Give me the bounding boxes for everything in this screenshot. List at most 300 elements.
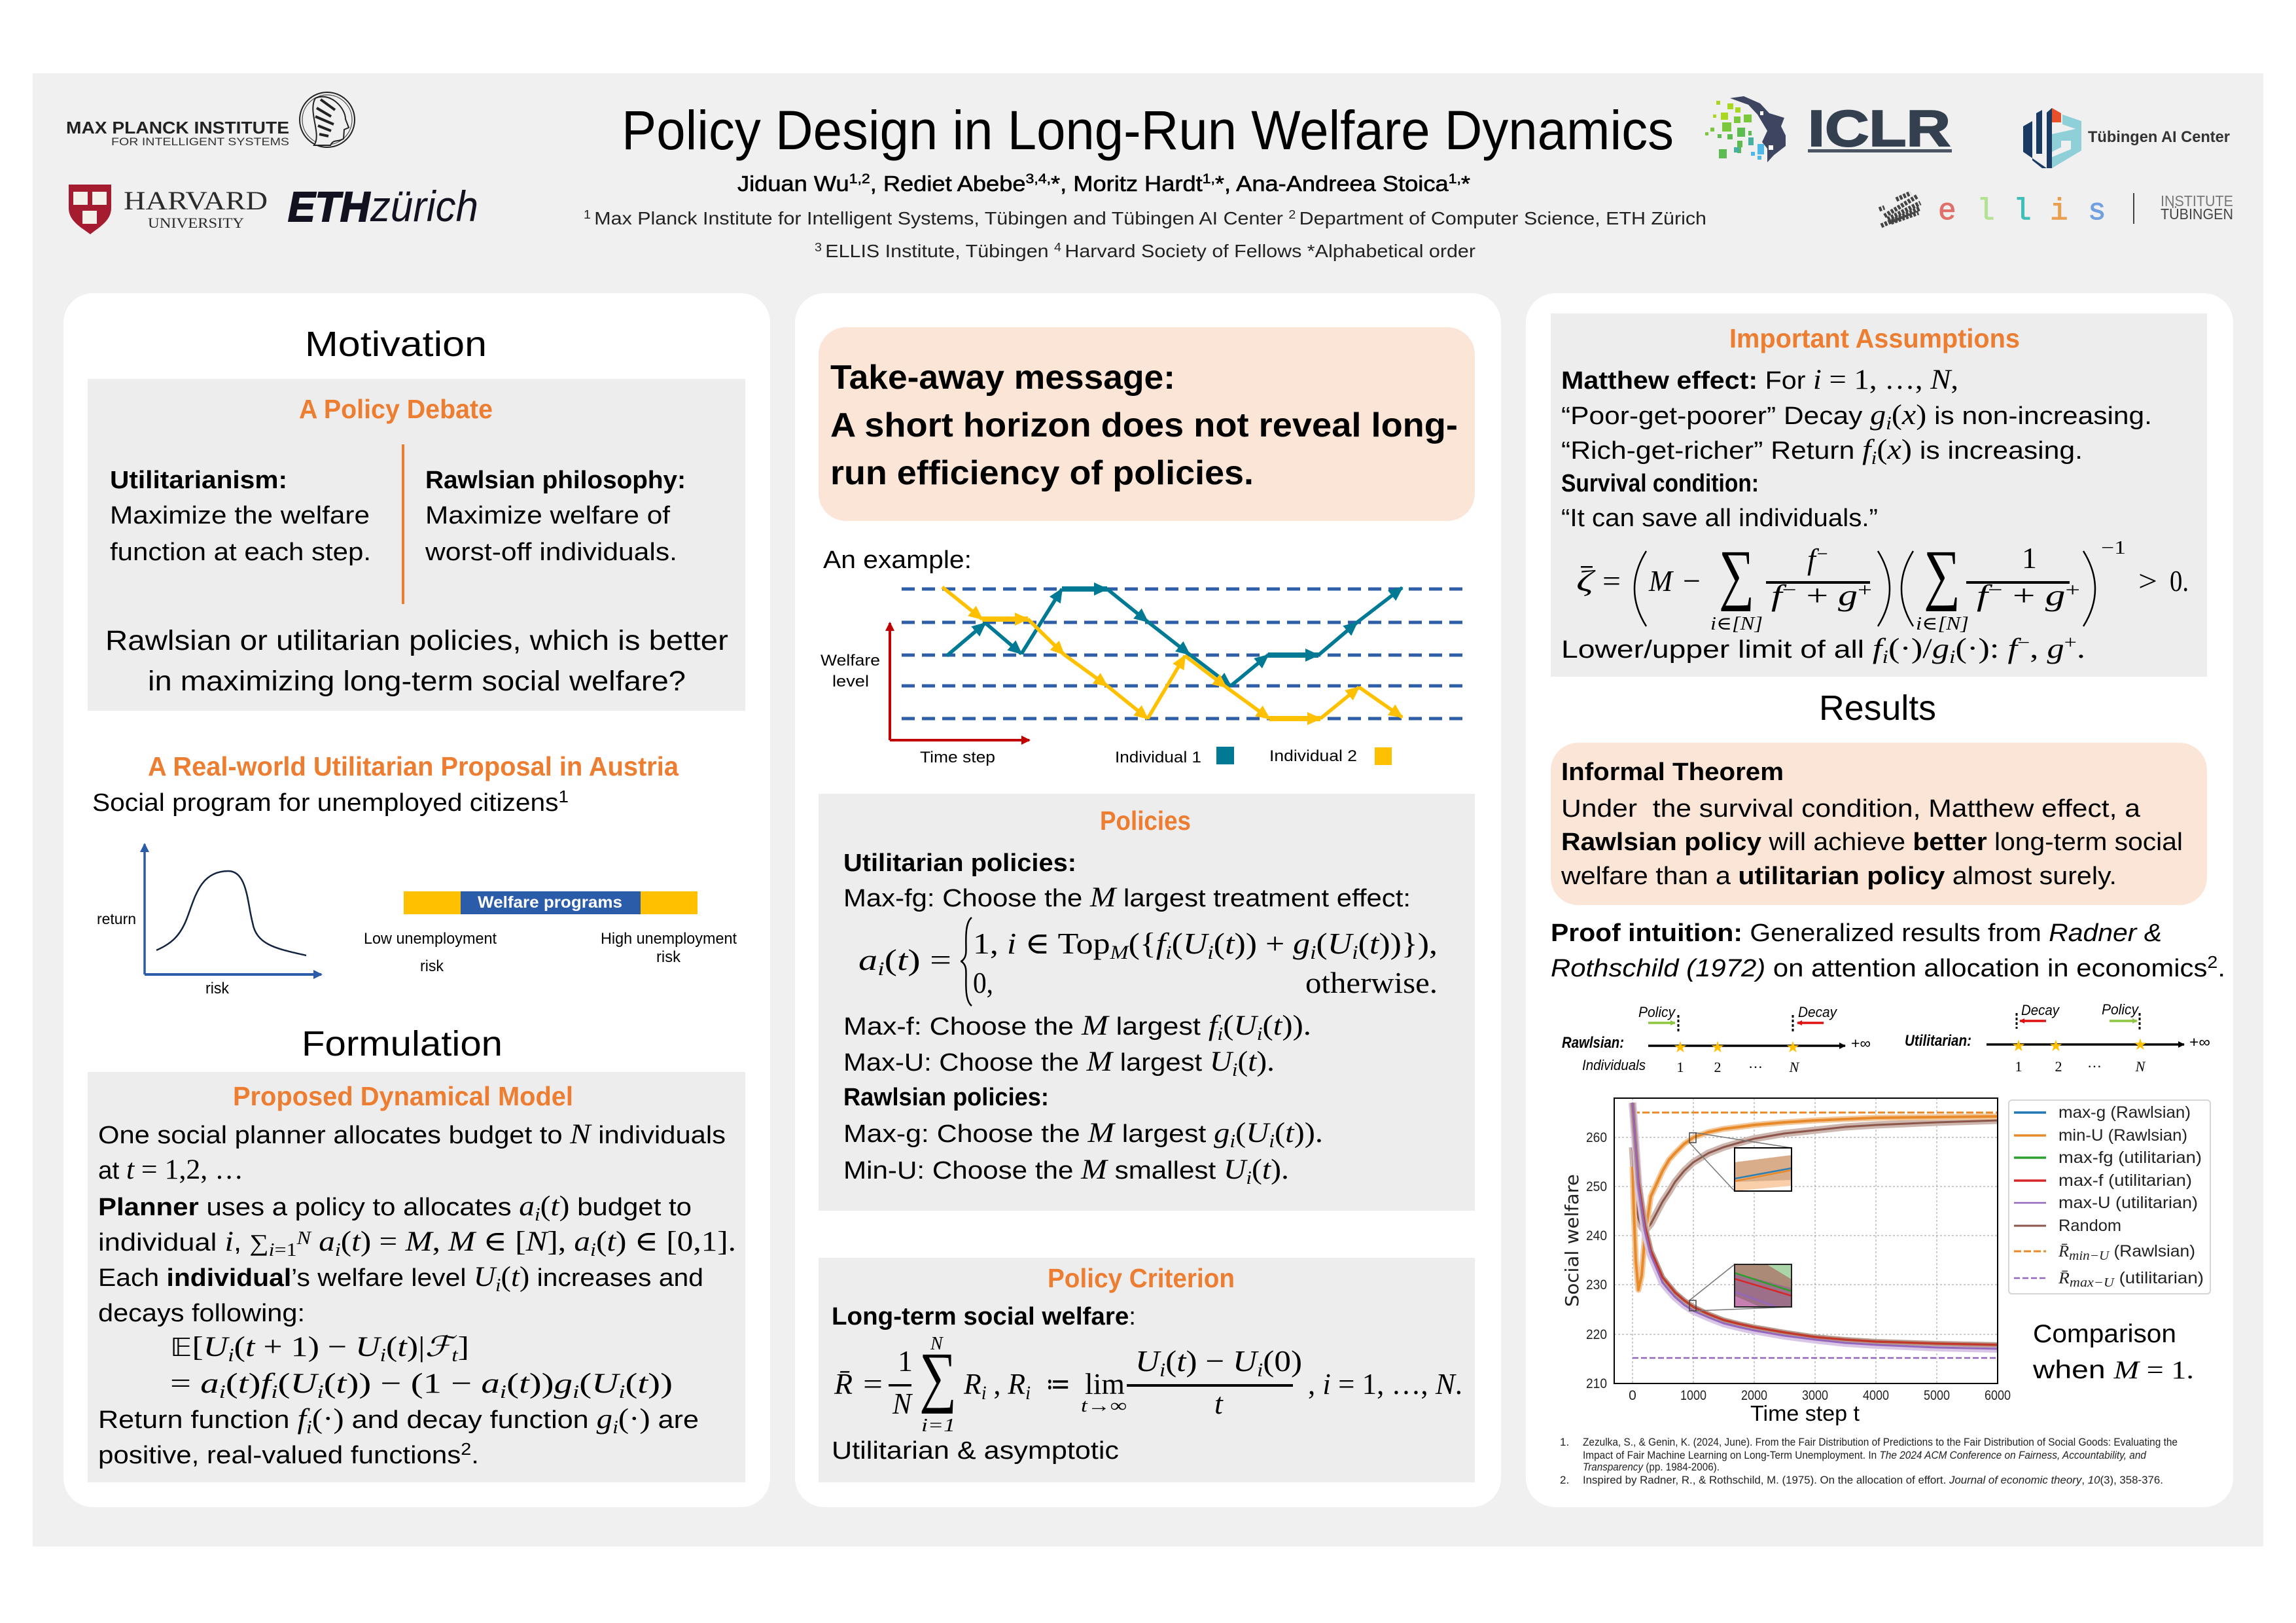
panel: policies: ( <box>1252 1154 1262 1185</box>
panel: policies: i <box>1246 1168 1252 1188</box>
text: comparison note <box>2032 1320 2194 1384</box>
axis tick labels: 210 <box>1586 1376 1607 1391</box>
text: matthew effect: ( <box>1877 435 1887 465</box>
axis tick labels: 260 <box>1586 1130 1607 1145</box>
heading: Motivation: Motivation <box>305 325 487 364</box>
diagram: rawlsian ordering: 2 <box>1714 1059 1721 1075</box>
diagram: utilitarian ordering: ★ <box>2049 1037 2063 1055</box>
panel: policy criterion <box>819 1258 1475 1482</box>
text: model description: a <box>311 1226 335 1257</box>
formula: survival condition: + <box>2003 579 2045 612</box>
text: comparison note: when M = 1. <box>2032 1356 2194 1384</box>
text: model description: t)|ℱ <box>397 1330 447 1363</box>
legend: R̄ <box>2058 1270 2070 1287</box>
logo: Max Planck Institute <box>66 92 355 148</box>
formula: long-term welfare: N <box>930 1334 944 1354</box>
formula: long-term welfare: t <box>1214 1387 1224 1420</box>
diagram: utilitarian ordering: Policy <box>2102 1001 2140 1018</box>
axis tick labels: 230 <box>1586 1277 1607 1293</box>
formula: survival condition <box>1576 537 2189 634</box>
panel: middle column <box>795 293 1501 1507</box>
formula: survival condition: −1 <box>2101 538 2126 558</box>
formula: survival condition: + <box>1858 579 1872 601</box>
axis tick labels <box>1586 1130 2011 1403</box>
logo: ELLIS Institute Tubingen: s <box>2088 194 2106 228</box>
panel: policies: t)). <box>1285 1118 1320 1149</box>
text: lower upper limit: i <box>1949 647 1956 668</box>
panel: policies: t)). <box>1273 1010 1308 1041</box>
formula: max-fg: t) = <box>897 943 942 976</box>
formula: max-fg: i <box>1207 942 1214 963</box>
text: lower upper limit: g <box>2047 633 2064 664</box>
legend: max-f (utilitarian) <box>2058 1171 2192 1190</box>
legend: max−U <box>2070 1275 2115 1290</box>
text: an example: An example: <box>823 546 972 574</box>
formula: max-fg: otherwise. <box>1305 966 1438 999</box>
text: model description: ( <box>540 1191 550 1222</box>
text: survival condition: “It can save all individuals.” <box>1561 505 1878 532</box>
text: long-term social welfare: Long-term social welfare: <box>832 1303 1136 1330</box>
panel: policies: ( <box>1263 1010 1273 1041</box>
diagram: rawlsian ordering: Policy <box>1638 1004 1676 1020</box>
formula: max-fg: i <box>1352 942 1358 963</box>
text: utilitarianism: Utilitarianism: <box>110 467 287 494</box>
formula: max-fg: a <box>858 943 877 976</box>
formula: long-term welfare: R <box>1007 1367 1025 1400</box>
chart: welfare programs bar: risk <box>420 957 444 975</box>
formula: max-fg: M <box>1109 942 1130 963</box>
logo: Harvard: HARVARD <box>124 186 268 215</box>
diagram: rawlsian ordering: N <box>1789 1059 1800 1075</box>
text: model description: decays following: <box>98 1300 305 1327</box>
axis tick labels: 4000 <box>1863 1388 1889 1403</box>
panel: policies: Max-g: Choose the M largest g <box>843 1118 1228 1149</box>
logo: Harvard: UNIVERSITY <box>148 215 244 231</box>
formula: max-fg: U <box>1183 927 1210 960</box>
text: model description: i <box>573 1382 579 1402</box>
text: model description: t <box>451 1346 459 1366</box>
text: matthew effect: i <box>1886 414 1892 434</box>
references: Transparency (pp. 1984-2006). <box>1583 1461 1720 1473</box>
panel: policies: t). <box>1248 1046 1273 1077</box>
text: rawlsian policies: Rawlsian policies: <box>843 1084 1049 1111</box>
axis tick labels: 220 <box>1586 1327 1607 1342</box>
authors: *, Ana-Andreea Stoica <box>1215 171 1449 196</box>
logo: ETH Zurich: zürich <box>370 182 478 230</box>
text: model description: N <box>296 1228 311 1249</box>
text: model description: (·) <box>618 1404 650 1435</box>
text: social program: 1 <box>559 787 569 806</box>
text: model description: =1 <box>275 1240 297 1260</box>
chart: social welfare over time <box>1561 1098 2210 1425</box>
affiliations line 2: ELLIS Institute, Tübingen <box>825 241 1054 261</box>
authors: 1, <box>1203 171 1215 187</box>
text: model description: ] <box>458 1332 469 1363</box>
formula: survival condition: M <box>1648 564 1674 597</box>
formula: long-term welfare: , <box>987 1367 1008 1400</box>
formula: max-fg: i <box>1310 942 1316 963</box>
text: model description: 2 <box>461 1439 471 1459</box>
diagram: rawlsian ordering: … <box>1748 1055 1763 1071</box>
formula: long-term welfare: R̄ <box>834 1367 853 1400</box>
heading: Formulation: Formulation <box>302 1024 503 1063</box>
legend: R̄ <box>2058 1243 2069 1260</box>
chart: welfare programs bar: Low unemployment <box>364 930 497 948</box>
authors: 1, <box>1449 171 1461 187</box>
heading: Results: Results <box>1819 688 1936 728</box>
formula: max-fg: i <box>877 958 885 980</box>
panel: policies: ( <box>1238 1046 1248 1077</box>
chart: return vs risk curve <box>97 844 321 997</box>
inset: utilitarian zoom <box>1689 1264 1792 1311</box>
text: proof intuition: 2 <box>2207 952 2217 972</box>
diagram: rawlsian ordering: Decay <box>1798 1004 1838 1020</box>
chart: welfare programs bar: risk <box>656 948 681 966</box>
text: model description: individual i, ∑ <box>98 1226 266 1257</box>
panel: policies: ( <box>1223 1010 1234 1041</box>
text: model description: ( <box>625 1368 637 1399</box>
text: model description: t + 1) − U <box>245 1332 376 1363</box>
text: model description: t)) <box>637 1368 667 1399</box>
text: utilitarianism: Maximize the welfare <box>110 502 370 529</box>
formula: max-fg: ( <box>1172 927 1183 960</box>
axis tick labels: 5000 <box>1924 1388 1950 1403</box>
text: model description: One social planner allocates budget to N individuals <box>98 1119 726 1150</box>
diagram: rawlsian ordering: Individuals <box>1582 1057 1646 1073</box>
formula: survival condition: i∈[N] <box>1710 614 1763 634</box>
authors: * <box>1461 171 1470 196</box>
text: model description: i <box>535 1205 540 1225</box>
text: model description: ( <box>506 1368 519 1399</box>
text: model description: t)) − (1 − a <box>336 1368 495 1399</box>
formula: survival condition: − <box>1683 564 1701 597</box>
chart: welfare level example: Individual 2 <box>1269 747 1357 765</box>
authors: , Rediet Abebe <box>870 171 1026 196</box>
text: model description: t) ∈ [0,1]. <box>607 1226 721 1257</box>
text: rawlsian philosophy: Maximize welfare of <box>425 502 670 529</box>
legend: min−U <box>2069 1249 2110 1263</box>
panel: left column <box>63 293 770 1507</box>
callout: informal theorem <box>1551 743 2207 905</box>
text: model description: U <box>592 1368 621 1399</box>
formula: long-term welfare: U <box>1135 1344 1161 1378</box>
text: utilitarian and asymptotic: Utilitarian & asymptotic <box>832 1437 1119 1465</box>
references: 1. <box>1560 1436 1569 1448</box>
text: lower upper limit: (·)/ <box>1888 633 1932 664</box>
diagram: rawlsian ordering: ★ <box>1673 1038 1687 1056</box>
heading: policies: Policies <box>1100 806 1191 836</box>
logo: ELLIS Institute Tubingen: i <box>2050 194 2068 228</box>
text: model description: t)f <box>238 1368 268 1399</box>
text: matthew effect <box>1561 365 2152 469</box>
text: lower upper limit: Lower/upper limit of all f <box>1561 633 1881 664</box>
authors: Jiduan Wu <box>737 171 839 196</box>
text: model description: ( <box>341 1226 351 1257</box>
text: model description: at t = 1,2, … <box>98 1154 243 1185</box>
axis label: time step: Time step t <box>1750 1401 1860 1425</box>
text: model description: t))g <box>519 1368 568 1399</box>
panel: policies: i <box>1269 1132 1275 1152</box>
affiliations line 2: Harvard Society of Fellows *Alphabetical order <box>1065 241 1475 261</box>
axis tick labels: 1000 <box>1680 1388 1706 1403</box>
text: utilitarian policies: Utilitarian policies: <box>843 849 1076 877</box>
logo: Max Planck Institute: MAX PLANCK INSTITUTE <box>66 118 289 137</box>
callout: take-away message <box>819 327 1475 521</box>
text: question: Rawlsian or utilitarian policies, which is better <box>105 625 728 656</box>
legend: (Rawlsian) <box>2109 1242 2195 1260</box>
panel: policies: i <box>1257 1024 1263 1044</box>
panel: policies: i <box>1217 1024 1223 1044</box>
text: utilitarianism <box>110 467 371 566</box>
panel: policies: ( <box>1275 1118 1285 1149</box>
formula: long-term welfare: N <box>892 1387 913 1420</box>
text: model description: ( <box>234 1332 245 1363</box>
axis label: social welfare: Social welfare <box>1561 1174 1583 1307</box>
formula: survival condition: ζ <box>1576 564 1597 597</box>
panel: policies: i <box>1229 1132 1235 1152</box>
formula: survival condition: ∑ <box>1924 537 1960 612</box>
text: model description: t) = M, M ∈ [N], a <box>351 1226 588 1257</box>
formula: long-term welfare: lim <box>1085 1367 1125 1400</box>
text: model description: ( <box>324 1368 336 1399</box>
formula: survival condition: f <box>1977 579 1993 612</box>
logo: ETH Zurich: ETH <box>288 183 371 230</box>
text: rawlsian philosophy <box>425 467 686 566</box>
text: model description: . <box>471 1442 479 1469</box>
text: model description: i <box>590 1240 596 1260</box>
divider <box>402 444 404 604</box>
legend: max-g (Rawlsian) <box>2058 1103 2191 1122</box>
logo: ICLR <box>1705 96 1952 162</box>
formula: long-term welfare <box>834 1334 1462 1436</box>
line: individual 1 <box>947 588 1402 686</box>
text: rawlsian philosophy: worst-off individuals. <box>425 539 677 566</box>
formula: survival condition: f <box>1771 579 1788 612</box>
text: proof intuition <box>1551 919 2225 982</box>
text: model description: ( <box>579 1368 592 1399</box>
text: question: in maximizing long-term social welfare? <box>148 666 686 697</box>
series: random <box>1633 1120 1998 1231</box>
text: survival condition: Survival condition: <box>1561 470 1759 497</box>
logo: Max Planck Institute: FOR INTELLIGENT SYSTEMS <box>111 135 289 148</box>
chart: welfare programs bar: Welfare programs <box>478 893 622 912</box>
formula: survival condition: − <box>1782 579 1797 601</box>
series: utilitarian policies <box>1633 1103 1998 1349</box>
formula: long-term welfare: 1 <box>898 1344 913 1378</box>
heading: policy criterion: Policy Criterion <box>1048 1263 1235 1293</box>
formula: long-term welfare: R <box>963 1367 981 1400</box>
text: model description: ( <box>278 1368 290 1399</box>
text: proof intuition: . <box>2217 955 2225 982</box>
text: lower upper limit: − <box>2017 633 2030 653</box>
formula: max-fg: ( <box>1214 927 1225 960</box>
text: lower upper limit: f <box>2007 633 2021 664</box>
formula: max-fg: ( <box>1316 927 1328 960</box>
diagram: utilitarian ordering: Utilitarian: <box>1905 1032 1971 1050</box>
text: model description: positive, real-valued functions <box>98 1442 426 1469</box>
chart: welfare level example <box>821 587 1465 766</box>
logo: Tubingen AI Center <box>2023 108 2230 168</box>
formula: survival condition: 0. <box>2170 564 2189 597</box>
formula: survival condition: g <box>2045 579 2065 612</box>
callout: informal theorem: welfare than a utilitarian policy almost surely. <box>1561 863 2117 890</box>
chart: welfare level example: Individual 1 <box>1115 749 1201 766</box>
text: model description: i <box>271 1382 278 1402</box>
formula: max-fg: ( <box>1358 927 1369 960</box>
diagram: utilitarian ordering: N <box>2135 1058 2146 1075</box>
legend: Random <box>2058 1217 2121 1235</box>
panel: policies: Min-U: Choose the M smallest U <box>843 1154 1244 1185</box>
callout: informal theorem: Informal Theorem <box>1561 758 1784 786</box>
text: model description: ( <box>386 1332 397 1363</box>
formula: survival condition: = <box>1602 564 1621 597</box>
text: model description: i <box>228 1346 234 1366</box>
text: model description: Return function f <box>98 1404 305 1435</box>
text: matthew effect: Matthew effect: For i = 1, …, N, <box>1561 365 1958 395</box>
formula: long-term welfare: ∑ <box>919 1339 957 1414</box>
formula: long-term welfare: t) − U <box>1176 1344 1254 1378</box>
references: Impact of Fair Machine Learning on Long-Term Unemployment. In The 2024 ACM Conference on Fairness, Accountability, and <box>1583 1449 2146 1461</box>
text: proof intuition: Proof intuition: Generalized results from Radner & <box>1551 919 2162 947</box>
text: model description: i <box>269 1240 275 1260</box>
diagram: utilitarian ordering <box>1905 1001 2210 1075</box>
logo: ELLIS Institute Tubingen: INSTITUTE <box>2161 192 2233 209</box>
diagram: utilitarian ordering: ★ <box>2011 1037 2026 1055</box>
formula: max-fg: f <box>1156 927 1170 960</box>
references: Zezulka, S., & Genin, K. (2024, June). From the Fair Distribution of Predictions to the Fair Distribution of Social Goods: Evaluating the <box>1583 1436 2178 1448</box>
diagram: rawlsian ordering: 1 <box>1676 1059 1684 1075</box>
inset: rawlsian zoom <box>1689 1133 1792 1191</box>
panel: policies: i <box>1232 1060 1238 1080</box>
authors: 1,2 <box>849 171 870 187</box>
formula: max-fg: ({ <box>1129 927 1156 960</box>
formula: long-term welfare: i <box>1159 1359 1165 1381</box>
heading: a policy debate: A Policy Debate <box>299 394 493 424</box>
text: rawlsian philosophy: Rawlsian philosophy: <box>425 467 686 494</box>
axis tick labels: 240 <box>1586 1228 1607 1243</box>
chart: welfare programs bar: High unemployment <box>601 930 737 948</box>
logo: ELLIS Institute Tubingen: l <box>2013 194 2032 228</box>
text: matthew effect: x) is increasing. <box>1887 435 2064 465</box>
diagram: utilitarian ordering: … <box>2087 1054 2102 1071</box>
callout: informal theorem: Under the survival condition, Matthew effect, a <box>1561 795 2141 823</box>
axis tick labels: 250 <box>1586 1179 1607 1194</box>
text: model description: i <box>335 1240 341 1260</box>
affiliations line 2: 4 <box>1054 241 1065 254</box>
logo: ICLR: ICLR <box>1808 99 1951 157</box>
heading: proposed dynamical model: Proposed Dynamical Model <box>233 1081 573 1111</box>
text: model description: ( <box>596 1226 607 1257</box>
affiliations line 1: 2 <box>1288 208 1299 221</box>
formula: long-term welfare: = <box>863 1367 883 1400</box>
text: model description: Each individual ’s welfare level U <box>98 1262 494 1293</box>
text: model description <box>98 1119 736 1469</box>
formula: max-fg: t)) + g <box>1225 927 1308 960</box>
logo: ELLIS Institute Tubingen: e <box>1938 194 1956 228</box>
text: model description: ( <box>501 1262 511 1293</box>
legend: min-U (Rawlsian) <box>2058 1126 2187 1145</box>
text: model description: i <box>618 1382 625 1402</box>
diagram: rawlsian ordering: +∞ <box>1851 1035 1871 1052</box>
formula: survival condition: + <box>1797 579 1838 612</box>
formula: long-term welfare: ( <box>1165 1344 1176 1378</box>
text: model description: i <box>500 1382 506 1402</box>
panel: proposed dynamical model <box>88 1072 745 1482</box>
chart: welfare level example: level <box>832 673 869 690</box>
formula: survival condition: g <box>1838 579 1858 612</box>
affiliations line 1: Department of Computer Science, ETH Zürich <box>1299 208 1706 228</box>
text: model description: i <box>495 1275 501 1296</box>
diagram: utilitarian ordering: 1 <box>2015 1058 2022 1075</box>
diagram: utilitarian ordering: Decay <box>2021 1002 2060 1018</box>
panel: policies: U <box>1246 1118 1271 1149</box>
formula: survival condition: + <box>2065 579 2080 601</box>
panel: important assumptions <box>1551 313 2207 677</box>
panel: policies: Max-fg: Choose the M largest treatment effect: <box>843 882 1411 913</box>
text: model description: Planner uses a policy to allocates a <box>98 1191 533 1222</box>
text: lower upper limit: . <box>2077 633 2085 664</box>
text: survival condition <box>1561 470 1878 532</box>
formula: max-fg: i <box>1165 942 1172 963</box>
panel: policies: U <box>1234 1010 1259 1041</box>
text: model description: are <box>657 1406 693 1434</box>
chart: welfare level example: Welfare <box>821 652 880 669</box>
affiliations line 2: 3 <box>815 241 825 254</box>
text: lower upper limit: + <box>2064 633 2077 653</box>
callout: take-away message: Take-away message: <box>830 359 1175 397</box>
formula: survival condition: − <box>1816 543 1829 565</box>
formula: survival condition: − <box>1988 579 2003 601</box>
authors: *, Moritz Hardt <box>1051 171 1203 196</box>
line: individual 2 <box>942 587 1402 719</box>
diagram: utilitarian ordering: +∞ <box>2189 1033 2210 1050</box>
panel: policies: t). <box>1262 1154 1287 1185</box>
formula: max-fg: 1, i ∈ Top <box>973 927 1099 960</box>
text: utilitarianism: function at each step. <box>110 539 371 566</box>
text: matthew effect: “Poor-get-poorer” Decay g <box>1561 400 1884 431</box>
logo: ELLIS Institute Tubingen: l <box>1977 194 1995 228</box>
text: model description: = a <box>170 1368 215 1399</box>
text: lower upper limit: (·): <box>1956 633 2007 664</box>
header <box>66 92 2233 261</box>
series: rawlsian policies <box>1633 1116 1998 1290</box>
chart: welfare programs bar <box>364 891 737 975</box>
axis tick labels: 0 <box>1629 1388 1636 1403</box>
text: model description: U <box>290 1368 319 1399</box>
text: question <box>105 625 728 697</box>
panel: a policy debate <box>88 379 745 711</box>
formula: max-fg: 0, <box>973 966 993 999</box>
chart: return vs risk curve: return <box>97 910 136 927</box>
text: model description: i <box>317 1382 324 1402</box>
text: model description: ( <box>226 1368 238 1399</box>
panel: policies: Max-f: Choose the M largest f <box>843 1010 1216 1041</box>
callout: informal theorem: Rawlsian policy will achieve better long-term social <box>1561 829 2183 856</box>
axis tick labels: 6000 <box>1985 1388 2011 1403</box>
panel: policies <box>819 794 1475 1211</box>
references <box>1560 1436 2178 1486</box>
plot frame <box>1614 1098 1998 1383</box>
references: 2. <box>1560 1474 1569 1486</box>
panel: policies: ( <box>1235 1118 1246 1149</box>
formula: long-term welfare: ≔ <box>1046 1367 1070 1400</box>
logo: Harvard <box>69 185 268 234</box>
legend: max-fg (utilitarian) <box>2058 1149 2202 1167</box>
heading: important assumptions: Important Assumptions <box>1729 323 2020 353</box>
chart: welfare level example: Time step <box>920 749 995 766</box>
text: model description: i <box>219 1382 226 1402</box>
callout: take-away message: A short horizon does not reveal long- <box>830 406 1458 444</box>
